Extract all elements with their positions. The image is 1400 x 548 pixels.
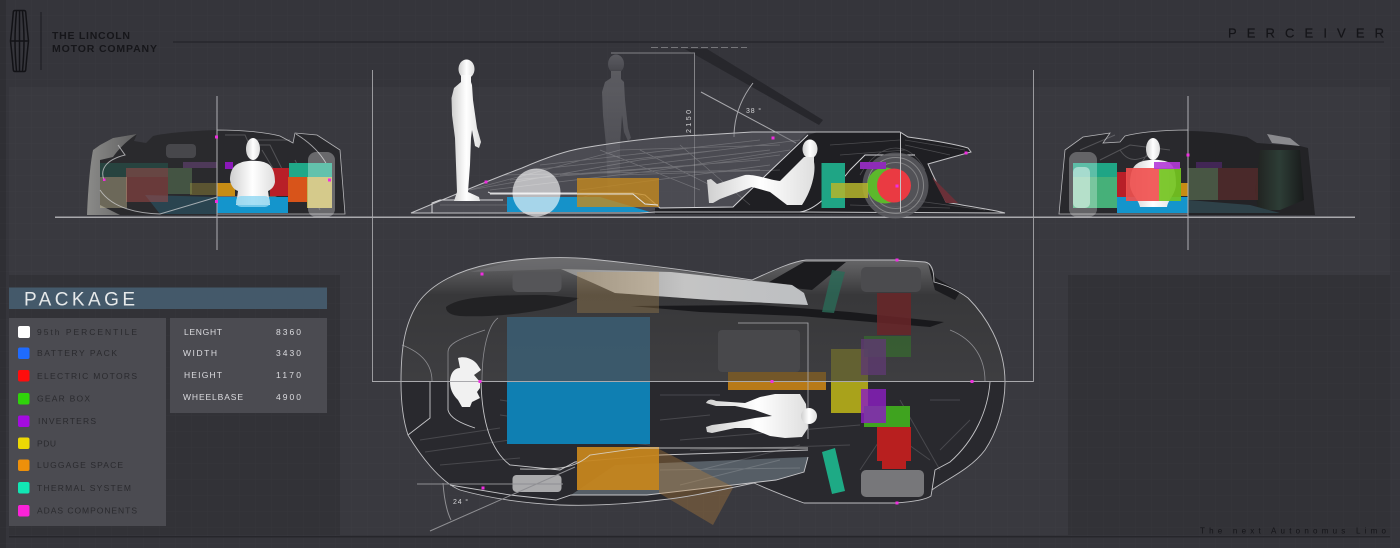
legend: 95th percentile: 95th PERCENTILE — [37, 327, 137, 337]
dimension: wheelbase: 4900 — [276, 392, 301, 402]
front view car: right — [1059, 130, 1315, 217]
door angle value: 38 ° — [746, 107, 761, 115]
motor — [270, 168, 289, 196]
dimension: height: 1170 — [276, 370, 301, 380]
ground line — [55, 216, 1355, 218]
muted pdu — [831, 349, 868, 382]
luggage — [217, 183, 235, 196]
seated person front — [1130, 138, 1176, 207]
dimension: width: 3430 — [276, 348, 301, 358]
muted gear box — [864, 336, 911, 357]
brand divider — [40, 12, 42, 70]
dimension: wheelbase — [183, 392, 301, 402]
raised door — [685, 49, 823, 125]
black rear volume — [655, 132, 1005, 214]
person legs in battery — [236, 196, 270, 207]
inverter — [861, 389, 886, 423]
panel: dimensions — [170, 318, 327, 413]
ADAS markers: side — [484, 136, 968, 188]
ghost person — [602, 54, 631, 195]
brand name: MOTOR COMPANY — [52, 43, 157, 55]
muted battery — [507, 317, 650, 381]
ADAS marker: front right — [1186, 154, 1190, 156]
dimension: length — [184, 327, 301, 337]
muted purple — [1196, 162, 1222, 168]
thermal — [822, 163, 845, 208]
pdu — [831, 382, 868, 413]
brand name: THE LINCOLN — [52, 30, 130, 42]
front view right axis — [1188, 96, 1189, 250]
muted green — [168, 168, 192, 194]
door angle — [701, 83, 796, 143]
battery — [1117, 197, 1188, 213]
driver small person — [450, 357, 481, 407]
front wheel — [512, 168, 560, 216]
door — [1255, 150, 1304, 210]
frame centre line over top view — [372, 381, 1033, 382]
wheel — [308, 152, 335, 217]
battery — [507, 197, 650, 212]
wire detail lines — [440, 140, 985, 210]
package heading: PACKAGE — [24, 290, 135, 310]
brand logo: Lincoln star — [10, 10, 28, 72]
dimension: width: WIDTH — [183, 348, 217, 358]
muted inverter — [861, 339, 886, 375]
dimension: length: 8360 — [276, 327, 301, 337]
muted motor — [877, 293, 911, 335]
rear wheel — [861, 470, 924, 497]
motor — [877, 427, 911, 469]
pdu — [831, 183, 868, 198]
gear box — [867, 168, 903, 204]
legend: gear box: GEAR BOX — [37, 394, 90, 404]
motor overlay — [288, 177, 307, 202]
tail light — [932, 177, 958, 203]
motor — [1126, 168, 1159, 201]
inverter — [1154, 162, 1180, 169]
top view car — [401, 258, 1005, 531]
front wheel — [512, 475, 562, 492]
luggage — [577, 178, 659, 207]
door swing — [659, 449, 734, 525]
pdu — [307, 177, 332, 208]
legend: inverters — [18, 416, 96, 427]
angle value: 24 ° — [453, 498, 468, 506]
thermal — [822, 448, 845, 494]
rear wheel outline — [900, 132, 902, 212]
upper half body — [401, 258, 1005, 382]
muted yellow — [190, 183, 217, 195]
dimension: height: HEIGHT — [184, 370, 222, 380]
body glass — [411, 132, 808, 213]
muted green — [1188, 168, 1218, 200]
legend: electric motors: ELECTRIC MOTORS — [37, 371, 137, 381]
top view person — [706, 394, 817, 438]
upper cabin outline — [402, 318, 985, 381]
seated person — [707, 140, 818, 205]
legend: luggage space: LUGGAGE SPACE — [37, 460, 123, 470]
rear wheel — [862, 152, 928, 218]
height dimension line — [611, 53, 694, 207]
window and floor lines — [432, 135, 915, 213]
height dimension value: 2150 — [686, 110, 693, 133]
dashed door height line — [651, 46, 747, 48]
dimension: length: LENGHT — [184, 327, 222, 337]
tagline: The next Autonomus Limo — [1200, 526, 1387, 536]
ADAS markers: top — [478, 258, 974, 504]
side sill line — [520, 448, 808, 469]
silver windscreen — [561, 269, 808, 305]
body outline — [401, 258, 1005, 505]
luggage centre — [728, 382, 826, 390]
panel: legend — [9, 318, 166, 526]
dimension: height — [184, 370, 301, 380]
body outline — [411, 132, 1005, 213]
muted teal — [100, 163, 168, 177]
wheel — [1069, 152, 1097, 217]
legend: inverters: INVERTERS — [38, 416, 96, 426]
muted luggage — [577, 272, 659, 313]
battery — [507, 382, 650, 444]
lower body — [1188, 200, 1280, 213]
electric motor — [877, 168, 911, 202]
thermal lower — [1073, 177, 1117, 208]
legend: battery pack: BATTERY PACK — [37, 348, 117, 358]
gear box — [1159, 168, 1181, 201]
right half body render — [1188, 131, 1315, 215]
side view car — [411, 48, 1005, 218]
legend: adas components: ADAS COMPONENTS — [37, 506, 137, 516]
front view centre axis — [216, 96, 218, 250]
left half line art — [1059, 130, 1188, 214]
rear fin — [1267, 134, 1300, 146]
motor rear — [1117, 172, 1127, 197]
luggage — [1181, 183, 1188, 196]
standing person — [452, 60, 481, 201]
angle lines — [417, 467, 575, 531]
inverter — [860, 162, 886, 169]
legend: thermal system: THERMAL SYSTEM — [37, 483, 131, 493]
muted purple — [183, 162, 217, 168]
legend: gear box — [18, 393, 90, 404]
gear box — [864, 406, 910, 427]
battery — [217, 197, 288, 213]
thermal upper — [1073, 163, 1117, 177]
seated person front — [230, 138, 275, 205]
lower half body — [401, 382, 1005, 505]
dimension frame lines — [372, 70, 1034, 382]
right half line art — [217, 130, 345, 214]
front view car: left — [87, 130, 345, 217]
muted luggage centre — [728, 372, 826, 382]
muted thermal — [822, 270, 845, 313]
ADAS markers: front left — [103, 136, 331, 203]
dimension: width — [183, 348, 301, 358]
inverter — [225, 162, 233, 169]
luggage door — [577, 447, 659, 490]
header rule — [173, 42, 1384, 43]
wheel inner — [1073, 167, 1090, 208]
thermal — [289, 163, 332, 177]
legend: 95th percentile — [18, 326, 137, 338]
centre cabin box — [738, 323, 808, 439]
dimension: wheelbase: WHEELBASE — [183, 392, 243, 402]
floor line over luggage — [490, 194, 658, 205]
left half body render — [87, 130, 217, 215]
project title: PERCEIVER — [1228, 26, 1384, 40]
muted red — [1218, 168, 1258, 200]
legend: pdu: PDU — [37, 438, 56, 448]
muted red — [126, 168, 168, 202]
footer rule — [9, 536, 1390, 538]
legend: pdu — [18, 438, 56, 449]
muted wheel — [100, 177, 127, 208]
package heading — [9, 288, 327, 310]
